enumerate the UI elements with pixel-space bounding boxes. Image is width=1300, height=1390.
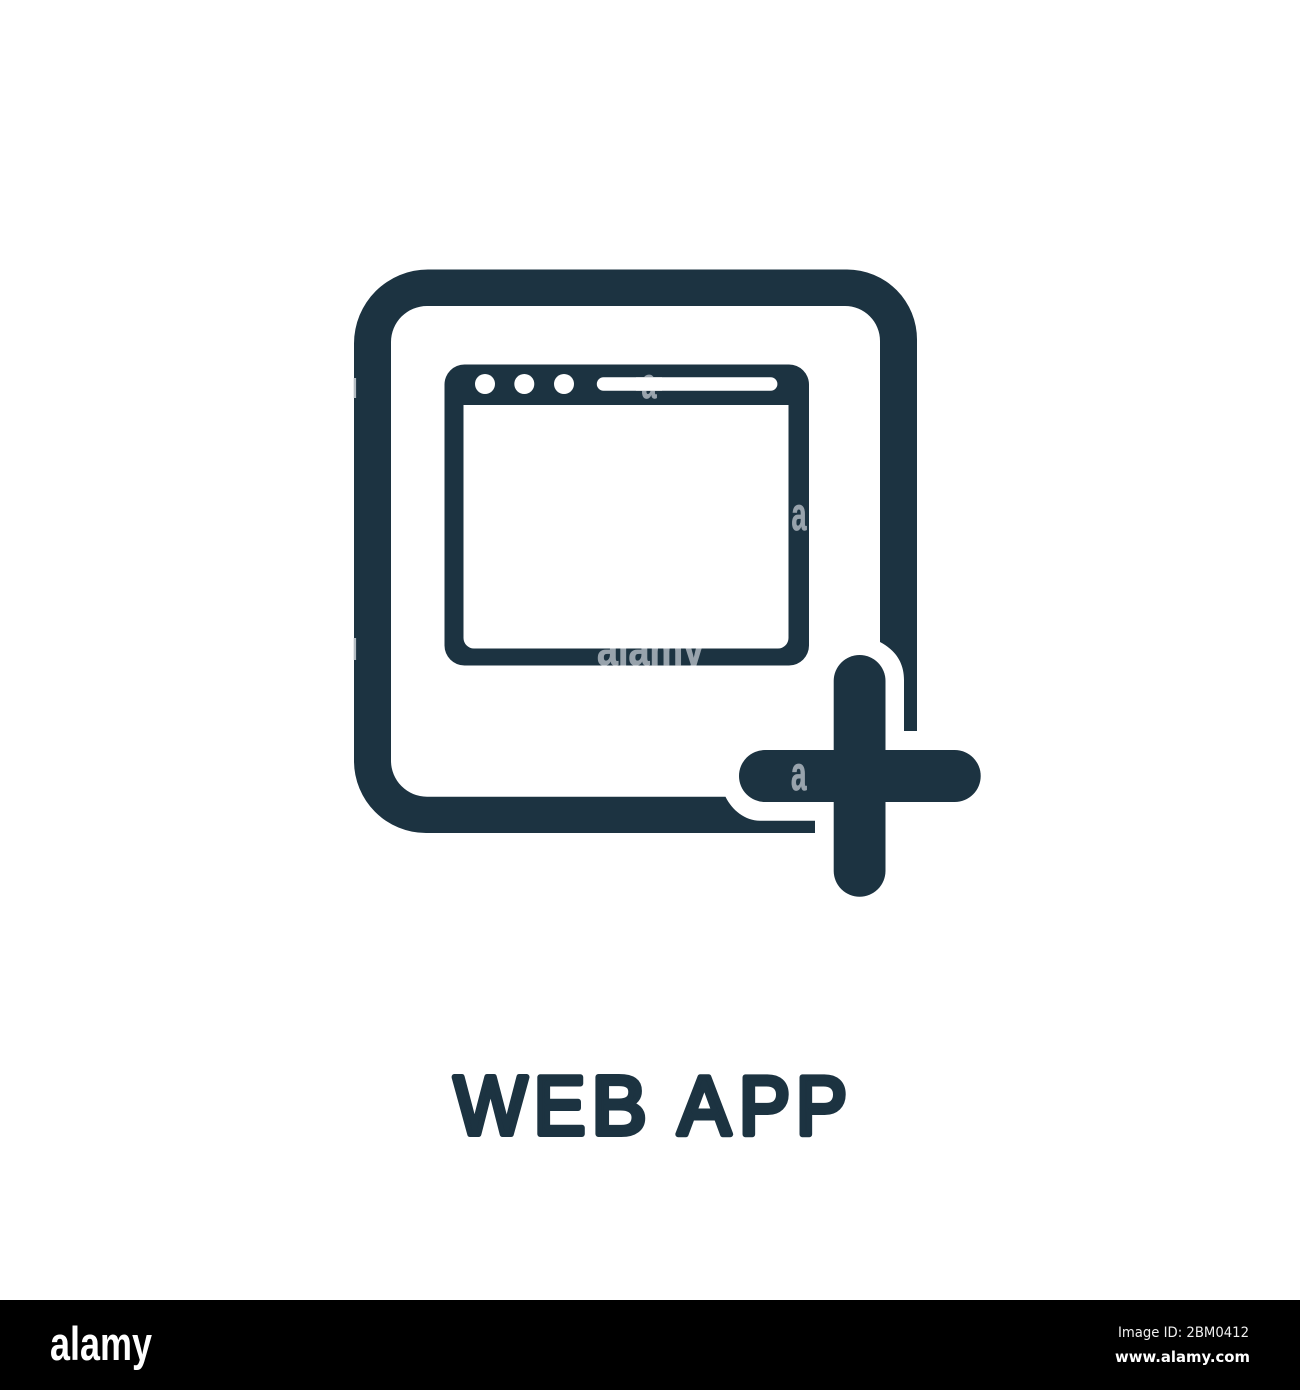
watermark bar cover (636, 377, 662, 391)
icon: web app (354, 270, 981, 897)
watermark letter on window edge: a (792, 488, 807, 540)
website: www.alamy.com (1115, 1348, 1250, 1366)
title: A (678, 1059, 731, 1152)
title: P (739, 1059, 790, 1152)
watermark sliver lower left (354, 638, 356, 660)
watermark sliver upper left (354, 378, 356, 398)
watermark letter on plus: a (791, 748, 807, 801)
footer logo: alamy (50, 1317, 152, 1370)
watermark word on window bottom edge: alamy (597, 623, 704, 675)
icon frame: rounded square with cut-out corner (354, 270, 917, 833)
title: E (534, 1059, 585, 1152)
watermark marks on icon (354, 360, 807, 801)
footer bar (0, 1300, 1300, 1390)
image id: Image ID: 2BM0412 (1118, 1325, 1249, 1341)
title: B (592, 1059, 647, 1152)
icon: browser window (444, 364, 809, 666)
browser control dots (475, 374, 574, 394)
browser window frame (444, 364, 809, 666)
icon: plus sign (739, 655, 981, 897)
title: W (454, 1059, 528, 1152)
browser address bar (597, 377, 777, 391)
title: P (796, 1059, 847, 1152)
watermark letter on address bar: a (642, 360, 657, 408)
